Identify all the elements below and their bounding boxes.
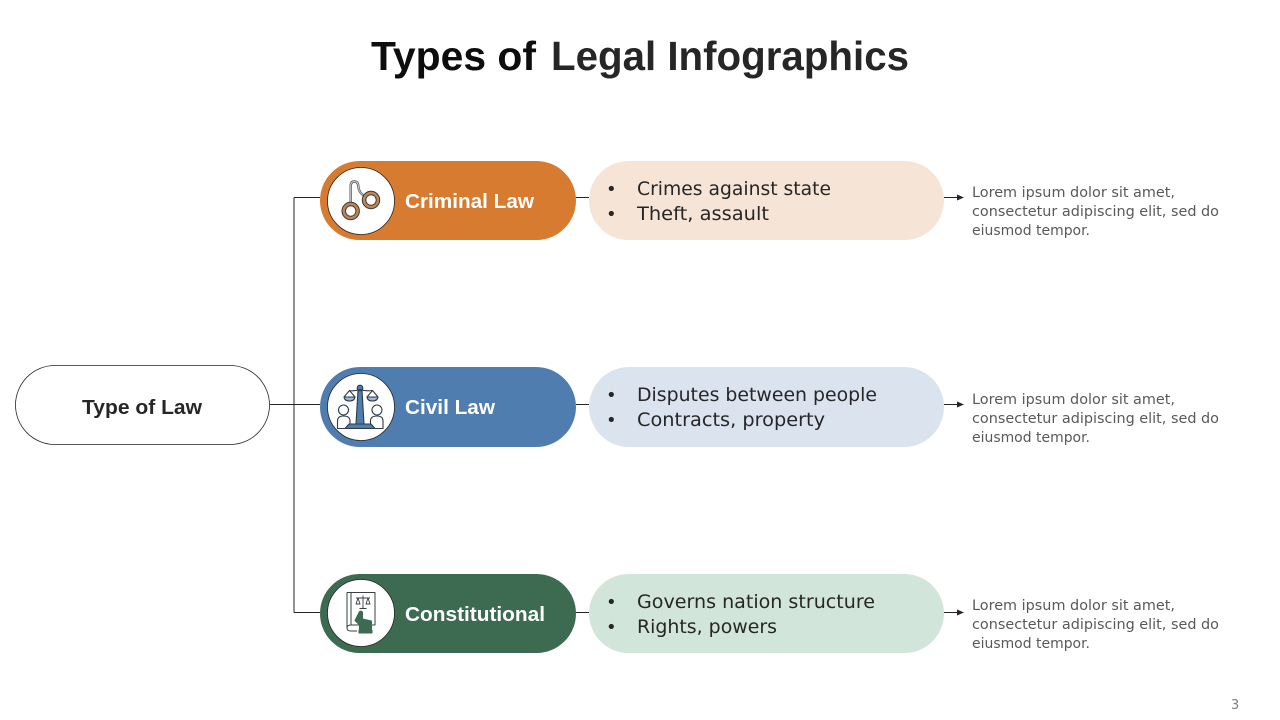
criminal law details: Crimes against state bbox=[637, 178, 831, 200]
civil law details: • bbox=[606, 410, 617, 431]
civil law details bbox=[589, 367, 944, 447]
constitutional details: Rights, powers bbox=[637, 616, 777, 638]
description text bbox=[972, 185, 1219, 239]
description text: consectetur adipiscing elit, sed do bbox=[972, 617, 1219, 633]
constitutional pill bbox=[320, 574, 576, 653]
page number: 3 bbox=[1231, 698, 1239, 713]
criminal law pill: Criminal Law bbox=[405, 191, 534, 213]
title bbox=[371, 33, 909, 79]
civil law details: Disputes between people bbox=[637, 384, 877, 406]
description text: eiusmod tempor. bbox=[972, 223, 1090, 239]
arrow bbox=[944, 194, 964, 200]
title: Types of bbox=[371, 33, 536, 79]
panel: constitutional row bbox=[320, 574, 1219, 653]
constitutional details: • bbox=[606, 592, 617, 613]
civil law pill bbox=[320, 367, 576, 447]
root node: Type of Law bbox=[16, 366, 270, 444]
description text: eiusmod tempor. bbox=[972, 636, 1090, 652]
arrow bbox=[944, 610, 964, 616]
description text bbox=[972, 598, 1219, 652]
civil law details: • bbox=[606, 385, 617, 406]
root node: Type of Law: Type of Law bbox=[82, 396, 202, 419]
constitutional details: • bbox=[606, 617, 617, 638]
icon: handcuffs bbox=[342, 182, 380, 220]
civil law pill: Civil Law bbox=[405, 397, 495, 419]
description text: Lorem ipsum dolor sit amet, bbox=[972, 598, 1175, 614]
description text: Lorem ipsum dolor sit amet, bbox=[972, 392, 1175, 408]
panel: civil law row bbox=[320, 367, 1219, 447]
civil law details: Contracts, property bbox=[637, 409, 825, 431]
description text: consectetur adipiscing elit, sed do bbox=[972, 411, 1219, 427]
arrow bbox=[944, 402, 964, 408]
icon: scales and two people bbox=[338, 385, 383, 428]
description text: consectetur adipiscing elit, sed do bbox=[972, 204, 1219, 220]
criminal law pill bbox=[320, 161, 576, 240]
icon: law book with hand bbox=[347, 592, 375, 633]
criminal law details: • bbox=[606, 179, 617, 200]
constitutional details: Governs nation structure bbox=[637, 591, 875, 613]
connector lines from root to branches bbox=[270, 198, 589, 612]
criminal law details bbox=[589, 161, 944, 240]
criminal law details: Theft, assault bbox=[636, 203, 769, 225]
title: Legal Infographics bbox=[551, 33, 909, 79]
description text bbox=[972, 392, 1219, 446]
description text: eiusmod tempor. bbox=[972, 430, 1090, 446]
constitutional pill: Constitutional bbox=[405, 604, 545, 626]
panel: criminal law row bbox=[320, 161, 1219, 240]
criminal law details: • bbox=[606, 204, 617, 225]
description text: Lorem ipsum dolor sit amet, bbox=[972, 185, 1175, 201]
constitutional details bbox=[589, 574, 944, 653]
